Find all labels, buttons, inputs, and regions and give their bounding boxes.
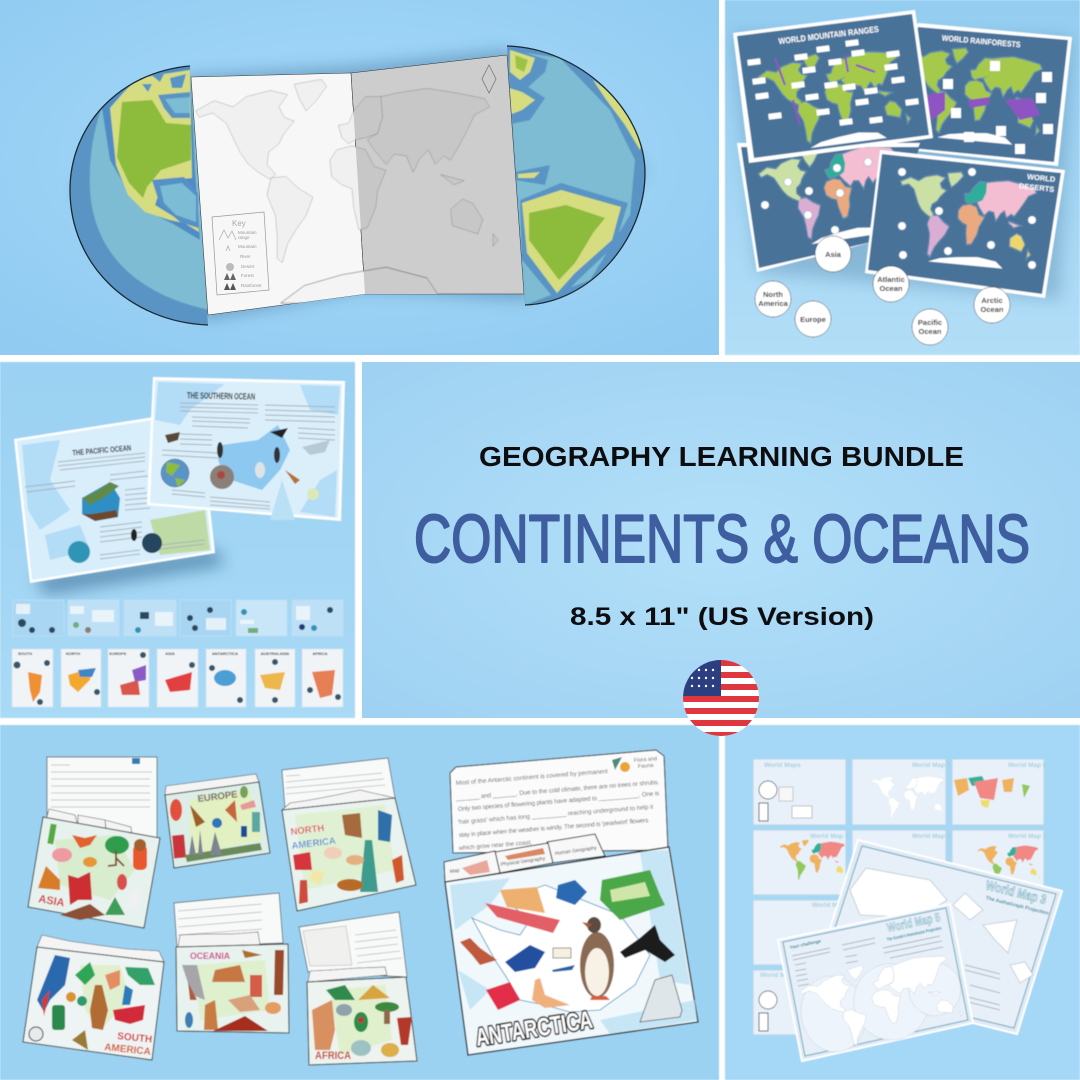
label discs: Asia	[825, 250, 842, 259]
map key: Key	[232, 219, 246, 228]
icon: icebreaker ship	[500, 887, 545, 913]
infographic thumbnails: continents row: ANTARCTICA	[212, 651, 238, 656]
label: NORTH	[290, 823, 325, 838]
title	[1019, 172, 1056, 194]
subtitle: The Goode's Homolosine Projection	[886, 925, 942, 942]
worksheet text sheet: Fauna	[638, 763, 655, 770]
card: Europe	[165, 774, 270, 868]
panel: ocean and continent infographics	[0, 362, 355, 718]
map key: Mountain	[238, 244, 257, 249]
icon: US flag circle	[683, 660, 759, 738]
worksheet text sheet: _______ and _______. Due to the cold climate, there are no trees or shrubs.	[455, 779, 660, 802]
icon: penguin	[255, 462, 265, 478]
title: THE PACIFIC OCEAN	[72, 443, 132, 458]
sheet: World Map 5	[778, 904, 973, 1061]
subtitle: paper size: 8.5 x 11" (US Version)	[570, 603, 874, 631]
icon: whale	[302, 440, 330, 455]
thumbnail map art: World Maps	[760, 972, 797, 979]
label: AFRICA	[315, 1050, 351, 1062]
label: AMERICA	[104, 1042, 151, 1058]
panel: world map posters with labels	[725, 0, 1080, 355]
label discs: Ocean	[919, 327, 942, 336]
infographic thumbnails: continents row: NORTH	[66, 651, 80, 656]
globe: left edge outline	[70, 66, 208, 325]
label discs: Pacific	[918, 318, 942, 327]
icon: iceberg	[640, 975, 682, 1022]
label: ANTARCTICA	[474, 1006, 594, 1052]
sheet: the Southern Ocean	[147, 377, 345, 521]
title: WORLD MOUNTAIN RANGES	[778, 24, 880, 46]
title: World Map 3	[984, 877, 1048, 907]
icon: penguin	[131, 529, 137, 541]
infographic thumbnails: continents row	[12, 649, 343, 707]
card: North America	[282, 758, 416, 911]
panel: coloring map folders	[0, 725, 719, 1080]
infographic thumbnails: continents row: EUROPE	[110, 651, 127, 656]
paper: right folded page	[351, 55, 524, 294]
label discs: Atlantic	[877, 275, 905, 284]
Antarctica map sheet	[445, 847, 698, 1055]
fold shading	[351, 55, 524, 294]
poster: world mountain ranges	[733, 10, 933, 163]
label discs: Europe	[800, 315, 826, 324]
thumbnail map art: World Map 6	[1008, 762, 1047, 769]
folder tabs: map, physical and human geography	[444, 834, 605, 882]
card: South America	[23, 935, 164, 1060]
card: Antarctica flora and fauna folder	[444, 750, 698, 1055]
icon: sailing ship	[165, 432, 180, 443]
label discs: North	[763, 290, 783, 299]
label discs: Arctic	[981, 296, 1003, 305]
worksheet text sheet	[450, 750, 668, 853]
worksheet text sheet: Only two species of flowering plants have adapted to ____________. One is	[458, 790, 660, 813]
map key: Rainforest	[241, 283, 262, 288]
label discs: Ocean	[880, 284, 903, 293]
worksheet thumbnails grid	[753, 759, 1044, 1035]
title: WORLD	[1027, 172, 1056, 184]
thumbnail map art: World Map 4	[812, 902, 851, 909]
icon: globe	[161, 459, 189, 487]
challenge text: Your challenge	[789, 938, 822, 950]
card: Oceania	[174, 893, 289, 1033]
icon: iceberg	[270, 480, 295, 520]
map key: range	[238, 235, 250, 240]
card: Asia	[28, 757, 160, 928]
thumbnail map art: World Map 2	[912, 833, 951, 840]
world outline map	[196, 79, 498, 303]
worksheet text sheet: which grow near the coast.	[458, 839, 533, 852]
map key: River	[240, 254, 251, 259]
icon: photo circle	[210, 465, 234, 489]
globe: right half with South America	[507, 46, 644, 304]
folder tabs: map, physical and human geography: Map	[449, 868, 460, 875]
icon: sunset photo circle	[142, 533, 162, 553]
label: SOUTH	[117, 1031, 153, 1046]
label discs: America	[758, 299, 789, 308]
label discs: Ocean	[981, 305, 1004, 314]
poster: world deserts	[865, 150, 1065, 298]
title: World Map 5	[886, 910, 942, 935]
label	[104, 1031, 153, 1058]
paper: left folded page	[191, 73, 365, 315]
label: ASIA	[37, 893, 65, 910]
map key	[212, 212, 269, 295]
icon: south pole sign	[552, 948, 575, 972]
icon: penguin	[580, 917, 614, 1000]
worksheet text sheet: Most of the Antarctic continent is covered by permanent	[456, 768, 608, 787]
worksheet text sheet: stay in place when the weather is windy. The second is 'pearlwort' flowers	[459, 817, 649, 839]
icon: aurora	[600, 870, 665, 920]
infographic thumbnails: continents row: SOUTH	[18, 651, 32, 656]
infographic thumbnails: oceans row	[13, 600, 343, 636]
sheet: World Map 3	[813, 840, 1062, 1034]
poster: world rainforests	[880, 23, 1072, 166]
icon: ocean photo circle	[68, 541, 90, 563]
map key: Forest	[241, 273, 255, 278]
panel: title block	[362, 362, 1080, 718]
label	[290, 823, 337, 852]
poster: world continents (blank)	[737, 139, 920, 272]
label: AMERICA	[291, 836, 337, 852]
infographic thumbnails: continents row: AUSTRALASIA	[261, 651, 289, 656]
panel: projection worksheets	[725, 725, 1080, 1080]
panel: fold-out globe with world map	[0, 0, 719, 355]
globe: right edge outline	[507, 46, 645, 305]
worksheet text sheet: 'hair grass' which has long __________ reaching underground to help it	[458, 804, 654, 826]
infographic thumbnails: continents row: ASIA	[165, 651, 175, 656]
map key: Desert	[241, 264, 255, 269]
map key: Mountain	[238, 230, 257, 235]
thumbnail map art: World Map 1	[810, 833, 849, 840]
title: DESERTS	[1019, 181, 1055, 194]
Antarctic sea map	[218, 425, 290, 490]
folder tabs: map, physical and human geography: Physical Geography	[500, 856, 546, 868]
infographic thumbnails: continents row: AFRICA	[312, 651, 328, 656]
icon: orca	[620, 925, 675, 962]
thumbnail map art: World Map 1	[912, 762, 951, 769]
thumbnail map art: World Map 5	[1008, 833, 1047, 840]
card: Africa	[299, 912, 417, 1065]
label: OCEANIA	[190, 951, 230, 962]
title: WORLD RAINFORESTS	[941, 34, 1022, 49]
globe: left half with North America	[70, 66, 208, 324]
icon: seal	[532, 978, 570, 1008]
icon: blue research hut	[556, 880, 587, 905]
subtitle: The AuthaGraph Projection	[985, 895, 1049, 917]
label discs	[755, 236, 1010, 345]
label: EUROPE	[197, 789, 238, 805]
title: THE SOUTHERN OCEAN	[187, 390, 255, 402]
folder tabs: map, physical and human geography: Human Geography	[554, 845, 598, 857]
thumbnail map art	[759, 762, 1047, 1031]
worksheet text sheet: Flora and	[634, 756, 657, 764]
icon: albatross	[460, 938, 497, 965]
sheet: the Pacific Ocean	[14, 410, 215, 583]
icon: snowcat	[486, 982, 520, 1010]
icon: ocean floor block	[82, 482, 120, 521]
compass rose	[482, 65, 496, 93]
icon: blue hut 2	[505, 945, 545, 972]
thumbnail map art: World Maps	[764, 762, 801, 769]
heading: bundle name: GEOGRAPHY LEARNING BUNDLE	[479, 441, 964, 472]
